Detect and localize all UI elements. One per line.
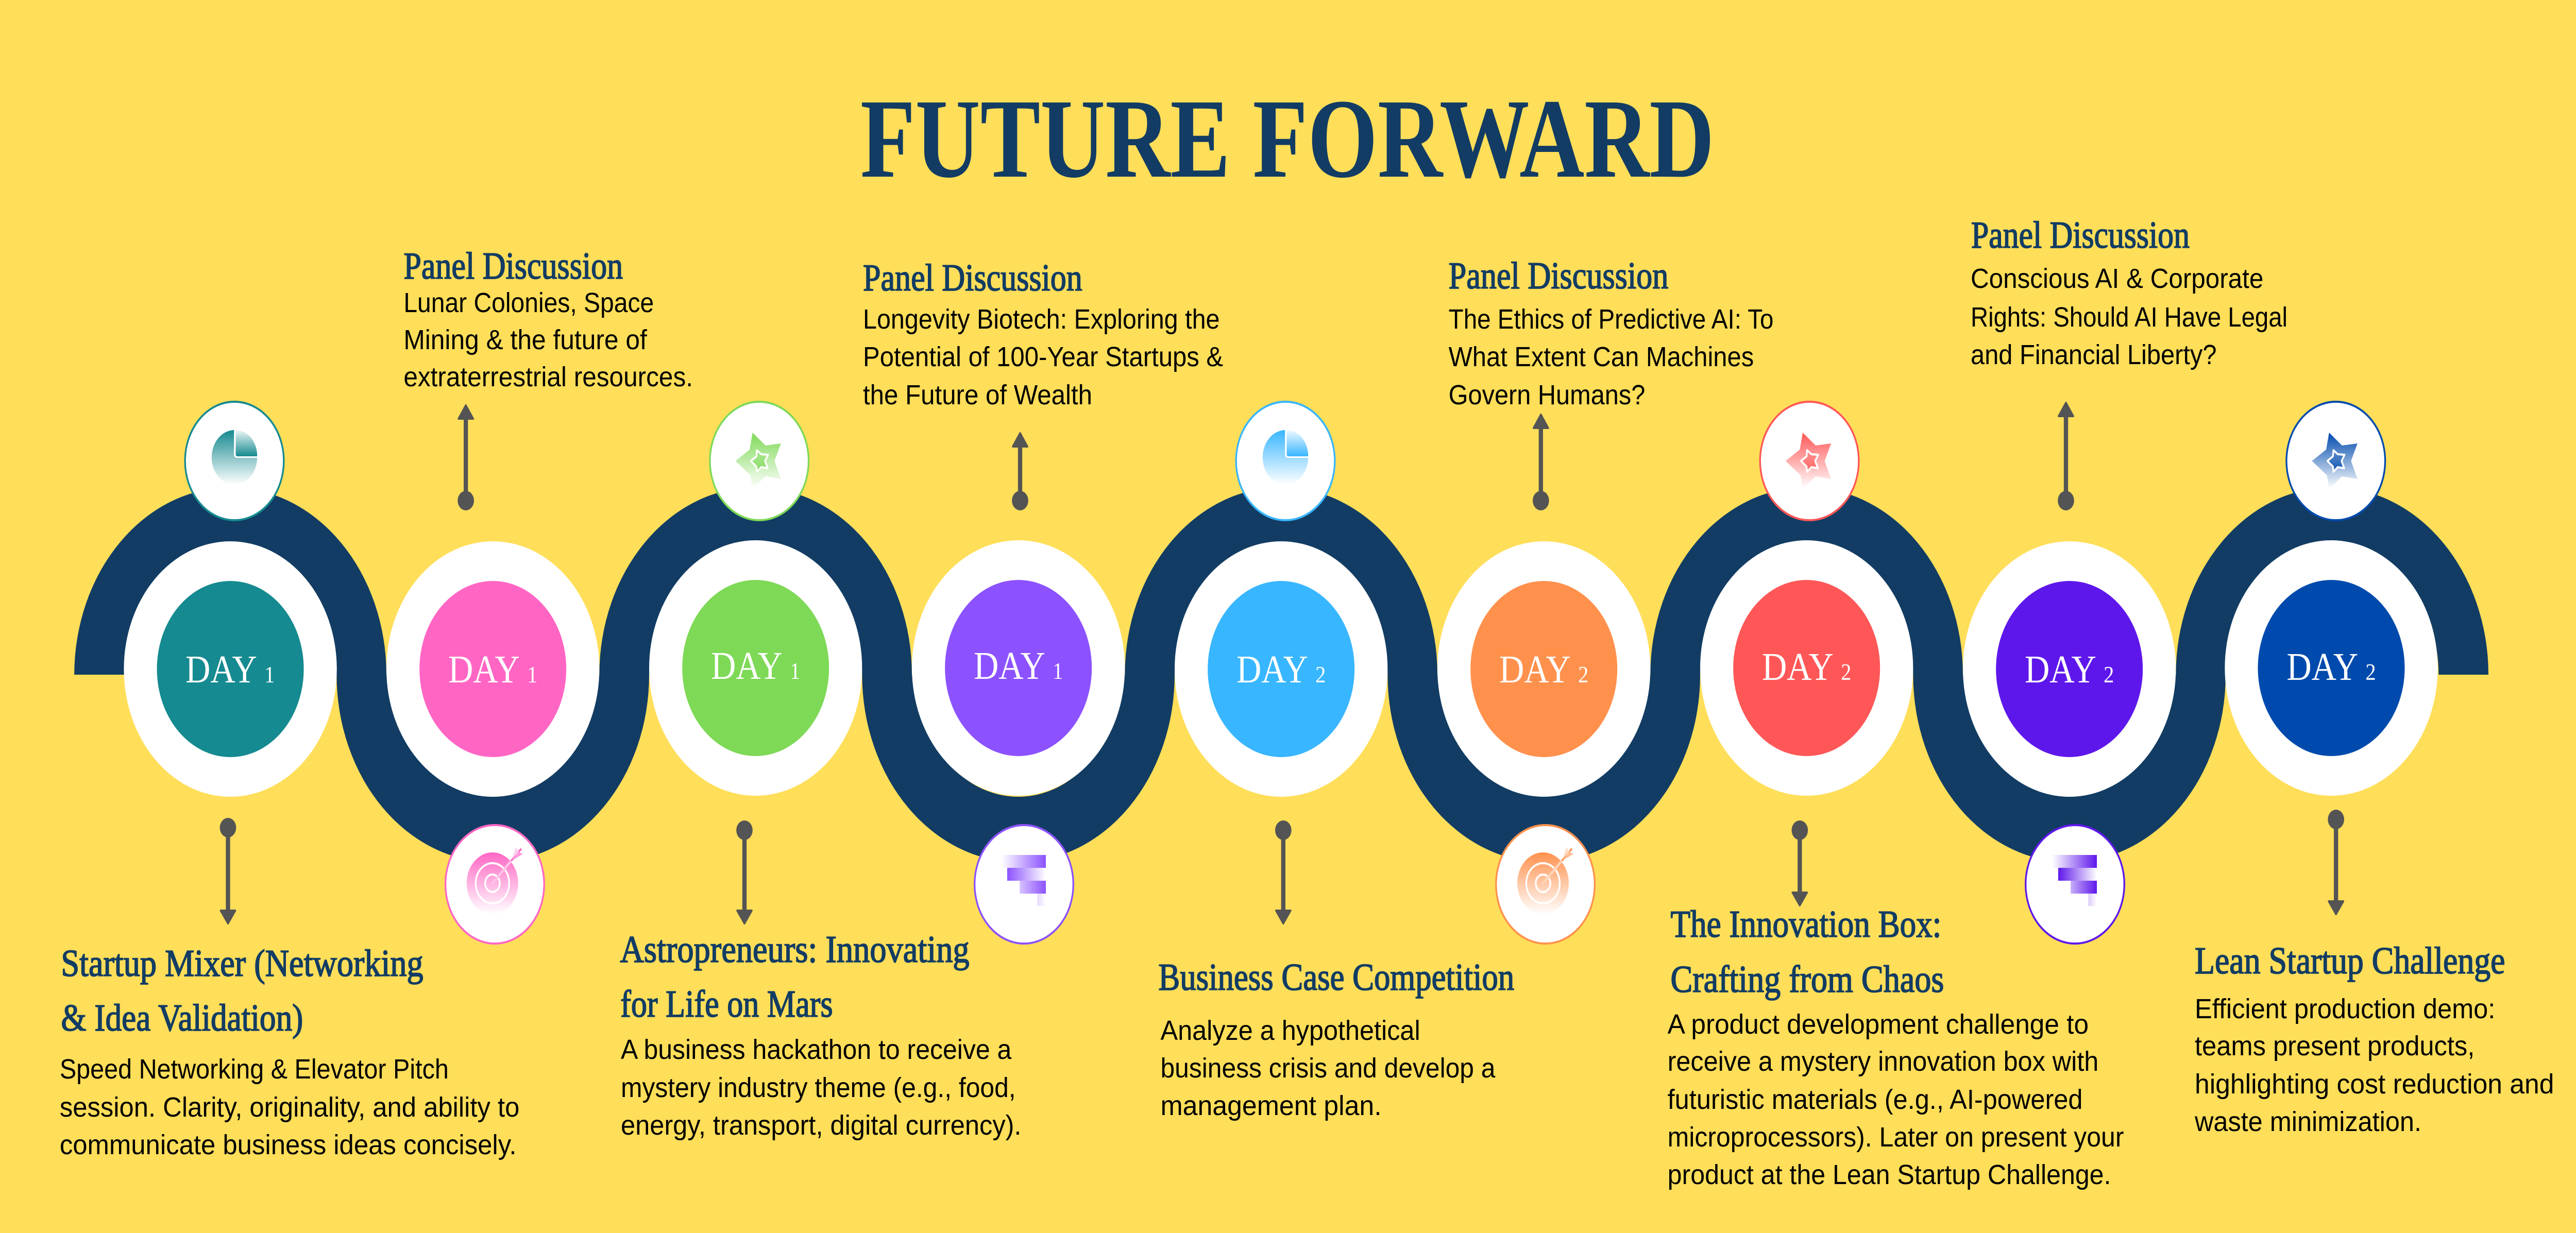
icon: green star	[710, 402, 809, 520]
title: FUTURE FORWARD	[860, 76, 1715, 201]
icon: teal pie chart	[185, 402, 284, 520]
day node 3	[649, 540, 862, 796]
day node 9: DAY 2	[2286, 646, 2376, 689]
day node 3: DAY 1	[711, 645, 800, 688]
heading line 2: & Idea Validation)	[61, 997, 303, 1039]
body	[1668, 1008, 2124, 1190]
body	[60, 1053, 519, 1160]
day node 5	[1175, 541, 1387, 797]
body	[1971, 263, 2287, 370]
icon: red star	[1760, 402, 1859, 520]
body: communicate business ideas concisely.	[60, 1129, 517, 1160]
text block: Panel Discussion, Longevity Biotech	[863, 256, 1223, 410]
text block: Panel Discussion, Conscious AI	[1971, 214, 2287, 370]
arrow down: step 5	[1275, 820, 1292, 923]
day node 8	[1963, 541, 2176, 797]
body: waste minimization.	[2194, 1106, 2421, 1137]
heading line 2: Crafting from Chaos	[1670, 958, 1944, 1000]
heading: Startup Mixer (Networking	[61, 942, 423, 984]
heading: Business Case Competition	[1158, 956, 1514, 998]
heading: Panel Discussion	[863, 256, 1082, 299]
arrow down: step 7	[1792, 820, 1808, 905]
body: What Extent Can Machines	[1449, 341, 1754, 372]
body	[863, 303, 1223, 410]
body: Analyze a hypothetical	[1160, 1015, 1420, 1046]
body: Longevity Biotech: Exploring the	[863, 303, 1220, 335]
body: A business hackathon to receive a	[621, 1034, 1012, 1065]
heading: Panel Discussion	[1449, 254, 1668, 297]
body: and Financial Liberty?	[1971, 339, 2217, 370]
icon: purple funnel bars	[975, 825, 1073, 944]
text block: Business Case Competition	[1158, 956, 1514, 1121]
heading: Lean Startup Challenge	[2195, 939, 2505, 982]
body: receive a mystery innovation box with	[1668, 1046, 2098, 1077]
body: session. Clarity, originality, and ability to	[60, 1091, 519, 1123]
heading: The Innovation Box:	[1670, 903, 1941, 945]
day node 6	[1437, 541, 1650, 797]
day node 8: DAY 2	[2025, 648, 2114, 691]
body: Govern Humans?	[1449, 379, 1645, 410]
text block: Panel Discussion, Lunar Colonies	[403, 245, 693, 392]
body: business crisis and develop a	[1160, 1052, 1496, 1084]
body: Potential of 100-Year Startups &	[863, 341, 1223, 372]
body	[403, 287, 693, 392]
body: Rights: Should AI Have Legal	[1971, 301, 2287, 333]
text block: Startup Mixer	[60, 942, 519, 1160]
text block: Astropreneurs	[620, 928, 1022, 1141]
body	[2194, 993, 2554, 1137]
arrow down: step 3	[736, 820, 753, 923]
body: management plan.	[1160, 1090, 1382, 1121]
body: Conscious AI & Corporate	[1971, 263, 2263, 294]
day node 2	[386, 541, 599, 797]
body: mystery industry theme (e.g., food,	[621, 1072, 1016, 1103]
body: futuristic materials (e.g., AI-powered	[1668, 1084, 2082, 1115]
day node 7: DAY 2	[1762, 646, 1851, 689]
text block: Panel Discussion, Ethics of Predictive AI	[1449, 254, 1774, 410]
icon: blue pie chart	[1236, 402, 1335, 520]
body: Mining & the future of	[403, 324, 647, 355]
arrow down: step 1	[220, 818, 236, 923]
icon: orange target	[1496, 825, 1595, 944]
icon: violet funnel bars	[2026, 825, 2124, 944]
serpentine timeline band	[74, 487, 2488, 862]
body	[1449, 303, 1774, 410]
day node 4: DAY 1	[974, 645, 1063, 688]
body: highlighting cost reduction and	[2195, 1068, 2554, 1100]
arrow up: step 2	[457, 405, 474, 510]
body: microprocessors). Later on present your	[1668, 1121, 2124, 1153]
body: Lunar Colonies, Space	[403, 287, 654, 318]
day node 7	[1700, 540, 1913, 796]
heading: Panel Discussion	[1971, 214, 2190, 256]
text block: The Innovation Box	[1668, 903, 2124, 1190]
day node 5: DAY 2	[1236, 648, 1326, 691]
body	[1160, 1015, 1496, 1121]
arrow up: step 8	[2058, 403, 2074, 510]
day node 2: DAY 1	[448, 648, 537, 691]
heading: Panel Discussion	[403, 245, 623, 287]
icon: navy star	[2286, 402, 2385, 520]
day node 1	[124, 541, 337, 797]
body	[621, 1034, 1022, 1141]
heading line 2: for Life on Mars	[620, 983, 833, 1025]
day node 9	[2225, 540, 2438, 796]
body: teams present products,	[2195, 1030, 2475, 1061]
body: product at the Lean Startup Challenge.	[1668, 1159, 2111, 1190]
body: energy, transport, digital currency).	[621, 1109, 1022, 1141]
body: A product development challenge to	[1668, 1008, 2089, 1040]
day node 1: DAY 1	[185, 648, 275, 691]
arrow down: step 9	[2328, 810, 2344, 914]
day node 4	[912, 540, 1125, 796]
day node 6: DAY 2	[1499, 648, 1588, 691]
heading: Astropreneurs: Innovating	[620, 928, 970, 970]
body: The Ethics of Predictive AI: To	[1449, 303, 1774, 335]
arrow up: step 4	[1012, 433, 1028, 510]
icon: pink target	[446, 825, 544, 944]
arrow up: step 6	[1533, 415, 1549, 510]
text block: Lean Startup Challenge	[2194, 939, 2554, 1137]
body: Speed Networking & Elevator Pitch	[60, 1053, 449, 1085]
body: the Future of Wealth	[863, 379, 1092, 410]
body: extraterrestrial resources.	[403, 361, 693, 392]
body: Efficient production demo:	[2195, 993, 2495, 1024]
